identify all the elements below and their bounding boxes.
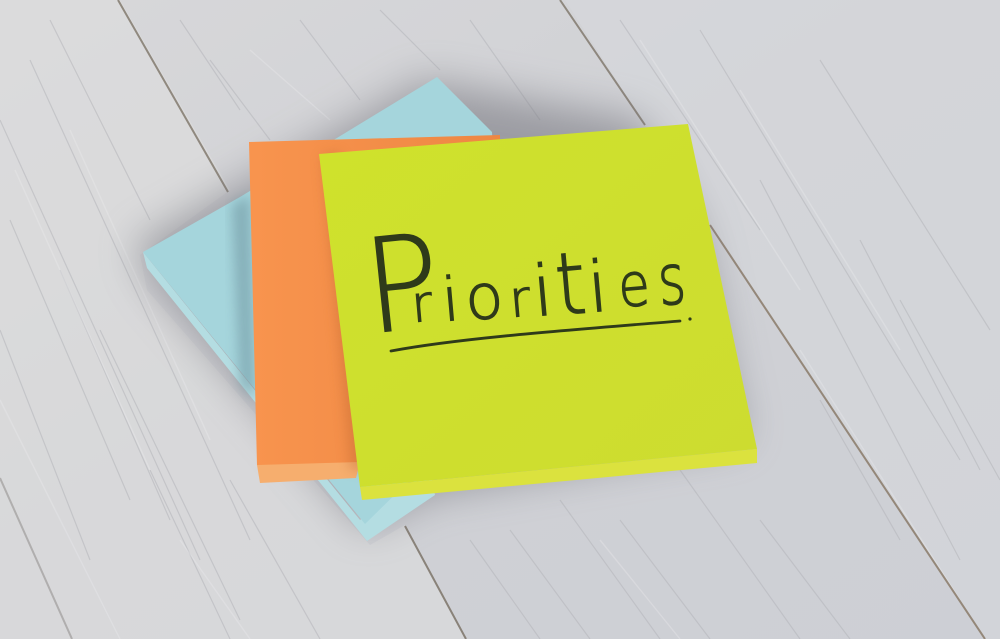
- shadow of lime note on orange: [322, 152, 375, 470]
- underline stroke: [391, 321, 680, 351]
- handwritten word: Priorities: r: [409, 274, 435, 334]
- handwritten word: Priorities: o: [462, 259, 506, 335]
- sticky note: blue: [143, 77, 500, 541]
- handwritten word: Priorities: r: [507, 269, 533, 329]
- sticky note: orange: [249, 135, 500, 483]
- handwritten word: Priorities: P: [357, 205, 447, 364]
- handwritten word: Priorities: s: [654, 238, 689, 322]
- sticky note: lime with handwritten word: [319, 124, 757, 500]
- handwritten word: Priorities: i: [584, 246, 611, 329]
- handwritten word: Priorities: e: [615, 250, 653, 322]
- handwritten word: Priorities: [357, 205, 689, 364]
- handwritten word: Priorities: t: [551, 234, 590, 336]
- handwritten word: Priorities: i: [529, 250, 556, 333]
- handwritten word: Priorities: i: [439, 265, 462, 336]
- soft shadow under the stack: [135, 80, 745, 530]
